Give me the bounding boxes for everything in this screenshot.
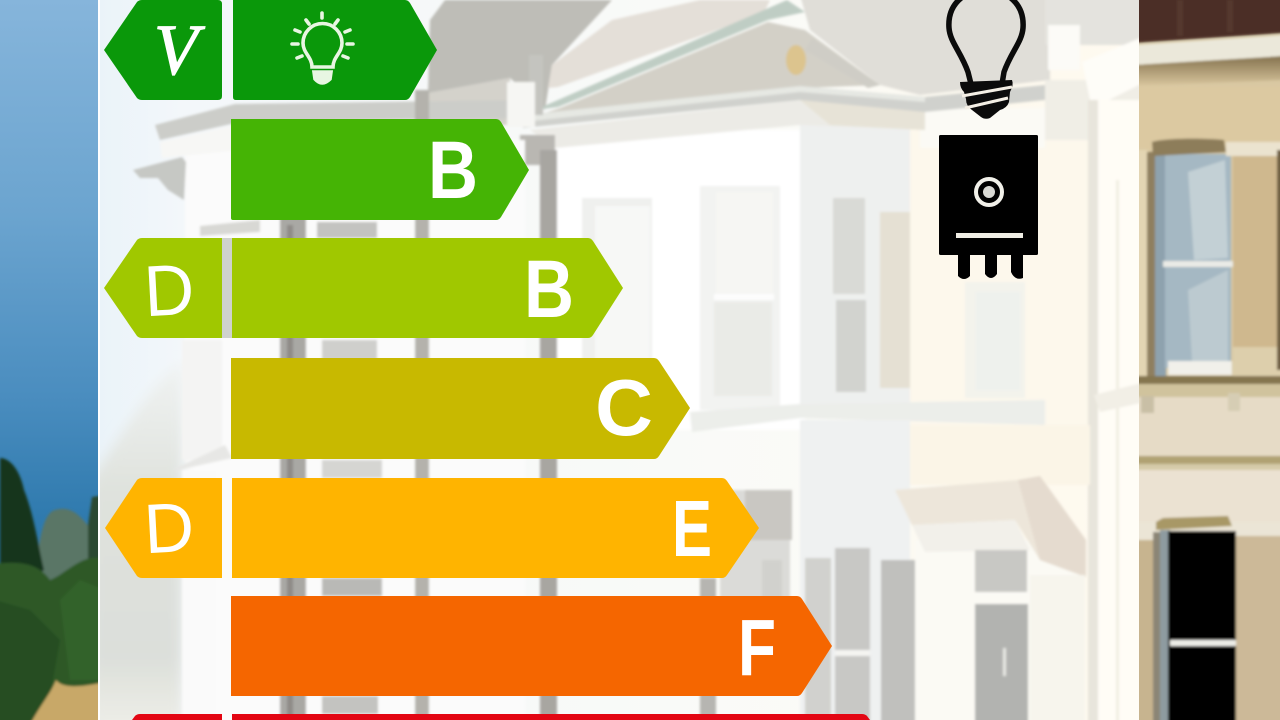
- right background: brick house facade: [1135, 0, 1280, 720]
- energy rating band B: [231, 119, 529, 220]
- string course: [1135, 376, 1280, 384]
- faded sill: [690, 400, 1045, 432]
- faded roof: [428, 0, 612, 110]
- tab D: D: [142, 250, 196, 332]
- icon: black light bulb: [949, 0, 1023, 119]
- energy rating band F: F: [738, 603, 776, 692]
- tab A with script tick: V: [154, 10, 205, 90]
- tab D: [105, 478, 222, 578]
- energy rating band D/B: B: [524, 244, 574, 335]
- faded left wing eaves and gutter: [185, 140, 525, 720]
- faded windows: [582, 198, 652, 358]
- icon: light bulb with rays: [292, 13, 353, 83]
- energy rating band D/E: [105, 478, 759, 578]
- energy rating band G: [132, 714, 870, 720]
- faded upper walls: [555, 130, 805, 430]
- tab D: [104, 238, 222, 338]
- energy rating band A: [104, 0, 437, 100]
- tab A with script tick: [104, 0, 222, 100]
- visible downpipes: [280, 210, 306, 720]
- bar A: [233, 0, 437, 100]
- bar: [232, 238, 623, 338]
- energy rating band B: B: [428, 125, 478, 216]
- energy rating band C: [231, 358, 690, 459]
- energy rating band C: C: [595, 363, 653, 452]
- lower sash window: [1139, 540, 1153, 720]
- faded lower storey: [800, 420, 910, 720]
- energy rating band D/B: [104, 238, 623, 338]
- energy rating band D/E: E: [672, 484, 712, 573]
- faded gutter and soffit: [532, 100, 828, 148]
- icon: black boiler: [939, 135, 1038, 279]
- upper sash window: [1139, 150, 1148, 378]
- energy rating band F: [231, 596, 832, 696]
- bar: [232, 478, 759, 578]
- left background: sky and foliage: [0, 0, 105, 720]
- hazy left foliage: [100, 378, 184, 720]
- tab D: D: [142, 488, 196, 568]
